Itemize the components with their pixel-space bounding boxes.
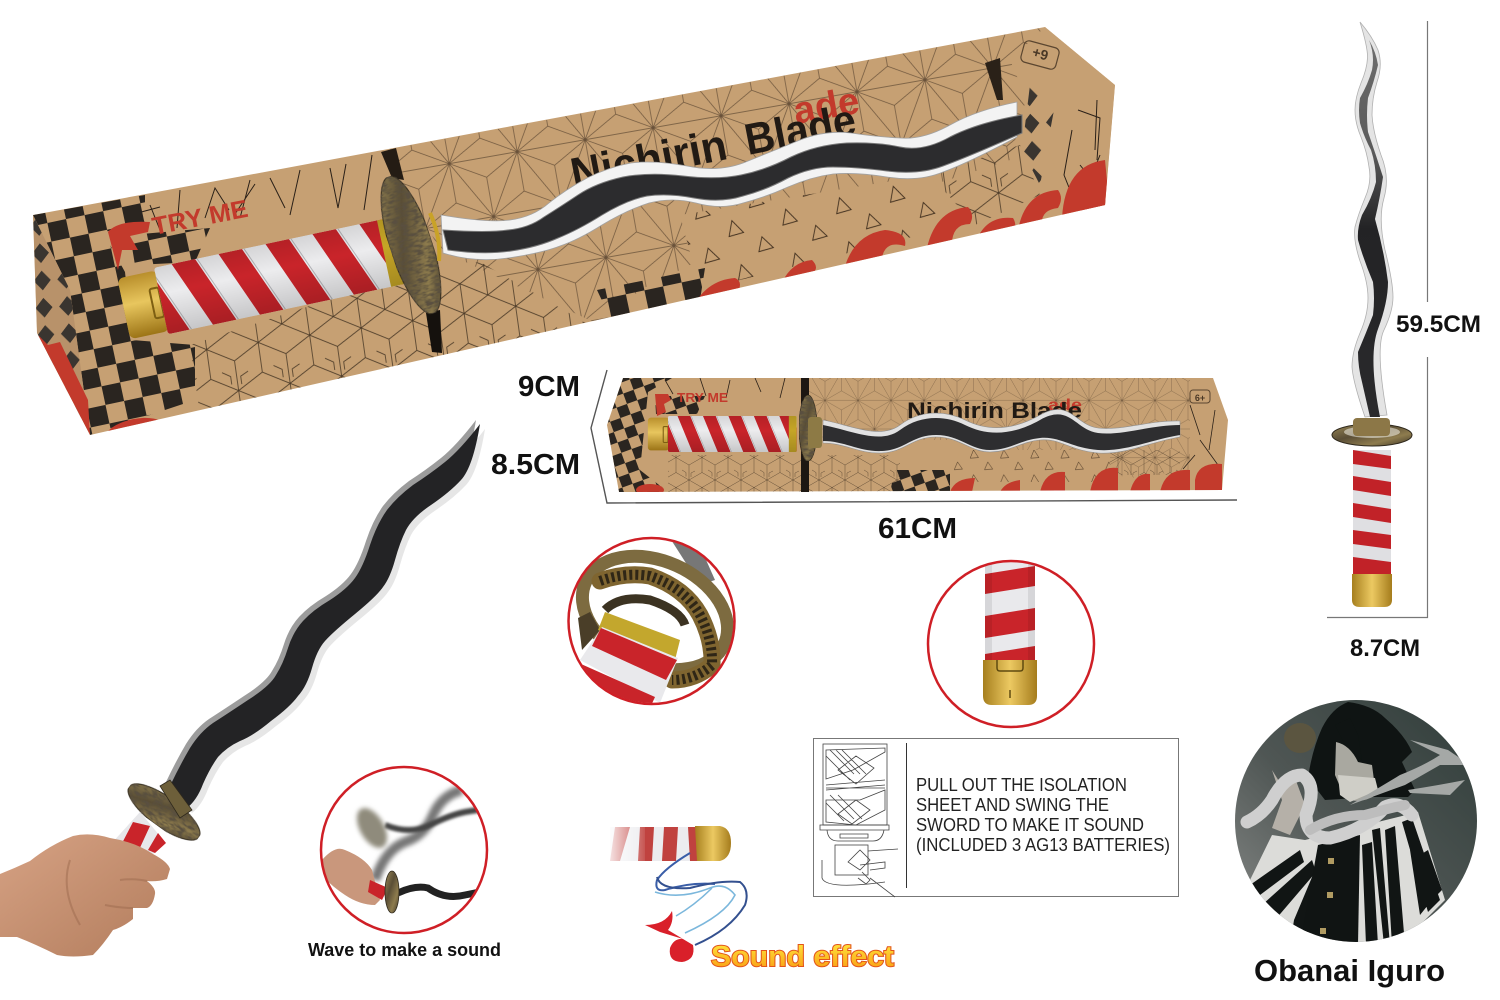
blurred upper blade bbox=[375, 790, 462, 880]
red arc near corner bbox=[108, 418, 158, 431]
detail circle: grip and battery end bbox=[928, 560, 1094, 727]
box body bbox=[33, 27, 1115, 435]
blurred middle blade bbox=[385, 808, 490, 830]
triangle pattern area bbox=[682, 176, 935, 258]
face bbox=[1335, 742, 1376, 801]
instruction panel bbox=[814, 738, 1178, 897]
crack lines on right face bbox=[1064, 100, 1100, 188]
hand bbox=[1272, 770, 1305, 835]
checker row lower centre bbox=[597, 268, 705, 322]
upright pommel bbox=[1352, 574, 1392, 607]
cube pattern on lower flap bbox=[190, 262, 590, 415]
small asanoha pattern bbox=[808, 378, 1190, 478]
red flames along bottom bbox=[699, 160, 1107, 297]
held guard bbox=[120, 775, 208, 849]
upright guard bbox=[1332, 418, 1412, 446]
caption: wave to make a sound: Wave to make a sound bbox=[308, 940, 501, 960]
packaged sword box, small dimension view bbox=[607, 378, 1228, 496]
gold pommel bbox=[983, 660, 1037, 705]
checker behind logo bbox=[130, 228, 210, 265]
TRY ME label: TRY ME bbox=[150, 195, 250, 241]
guard in box bbox=[369, 170, 453, 320]
small checker lower bbox=[890, 470, 950, 492]
small checker end flap bbox=[607, 378, 672, 492]
red logo mark bbox=[108, 222, 150, 270]
snake scales bbox=[600, 575, 712, 680]
small TRY ME label: TRY ME bbox=[677, 391, 728, 405]
haori black stripes bbox=[1250, 818, 1442, 945]
red ring bbox=[321, 767, 487, 933]
instruction text: SHEET AND SWING THE bbox=[916, 794, 1109, 815]
right end face bbox=[1010, 27, 1115, 205]
right window slit bbox=[985, 58, 1003, 100]
cube pattern right of centre bbox=[942, 145, 1040, 224]
dimension: 61CM: 61CM bbox=[878, 513, 957, 545]
small checker behind logo bbox=[655, 396, 705, 414]
hand bbox=[0, 834, 170, 956]
crack lines on upper left panel bbox=[142, 154, 372, 230]
small red logo bbox=[655, 394, 671, 416]
small box title: ade bbox=[1048, 397, 1082, 414]
red ring bbox=[568, 538, 734, 704]
box title bbox=[567, 80, 863, 199]
box title: ade bbox=[790, 80, 863, 133]
small box title: Nichirin Blade bbox=[907, 398, 1082, 423]
mask bandage bbox=[1338, 775, 1378, 802]
held handle bbox=[100, 812, 165, 862]
small cube pattern right bbox=[1110, 450, 1180, 475]
hand in circle bbox=[322, 849, 380, 905]
packaged sword box, large view bbox=[33, 27, 1115, 451]
instruction text: (INCLUDED 3 AG13 BATTERIES) bbox=[916, 834, 1170, 855]
portrait background bbox=[1230, 695, 1482, 947]
small age mark bbox=[1190, 390, 1210, 403]
snake body bbox=[600, 575, 712, 680]
label: Sound effect bbox=[711, 941, 894, 973]
dimension: 9CM: 9CM bbox=[518, 371, 580, 403]
box title: Blade bbox=[741, 95, 860, 165]
wavy blade in box bbox=[441, 102, 1022, 260]
inner coil bbox=[605, 599, 685, 625]
pommel slot bbox=[997, 660, 1023, 698]
left side face bbox=[33, 215, 90, 435]
small triangles bbox=[950, 450, 1110, 482]
body with stripes bbox=[1250, 812, 1445, 945]
checker pattern on end flap bbox=[33, 195, 195, 435]
red flame on side bbox=[38, 335, 90, 435]
small age mark: 6+ bbox=[1195, 393, 1205, 403]
small box body bbox=[607, 378, 1228, 492]
small snake head bbox=[578, 612, 600, 650]
instruction text: PULL OUT THE ISOLATION bbox=[916, 774, 1127, 795]
dimension: 8.5CM: 8.5CM bbox=[491, 449, 580, 481]
asanoha pattern on back wall bbox=[385, 27, 1045, 325]
line drawing of battery compartment bbox=[820, 744, 898, 897]
box title: Nichirin bbox=[567, 121, 731, 199]
small red flames bbox=[636, 464, 1222, 492]
age mark: 6+ bbox=[1030, 44, 1050, 64]
guard in circle bbox=[385, 871, 399, 913]
small guard bbox=[799, 395, 822, 461]
character name: Obanai Iguro bbox=[1254, 953, 1445, 988]
handle red stripe bbox=[592, 628, 677, 680]
dimension lines around small box bbox=[591, 370, 1237, 503]
upper guard slot bbox=[381, 148, 404, 180]
held handle red stripes bbox=[118, 822, 166, 853]
handle in box bbox=[117, 213, 424, 342]
lower guard slot bbox=[426, 310, 442, 353]
upright silver edge bbox=[1352, 22, 1393, 417]
sound effect illustration bbox=[605, 825, 894, 973]
finger shading bbox=[67, 860, 147, 925]
snake bbox=[1247, 775, 1412, 838]
small guard slot bbox=[801, 378, 809, 492]
instruction text: SWORD TO MAKE IT SOUND bbox=[916, 814, 1144, 835]
character portrait bbox=[1230, 695, 1482, 947]
upright sword with height and width bbox=[1332, 22, 1412, 607]
handle in circle bbox=[368, 880, 385, 900]
grip shading bbox=[985, 560, 1035, 664]
dimension: 59.5CM: 59.5CM bbox=[1396, 311, 1481, 338]
hair bbox=[1308, 702, 1415, 800]
small handle bbox=[648, 416, 807, 452]
triangles bbox=[686, 186, 936, 280]
age mark bbox=[1020, 40, 1060, 70]
hand holding sword bbox=[0, 420, 485, 956]
grip red stripes bbox=[985, 566, 1035, 664]
handle collar bbox=[598, 612, 680, 660]
small cube pattern bbox=[668, 455, 900, 492]
buttons bbox=[1320, 858, 1334, 934]
blade stub bbox=[672, 542, 715, 582]
left side diamonds bbox=[33, 220, 81, 418]
small triangle pattern bbox=[1009, 450, 1110, 470]
uniform centre bbox=[1300, 835, 1360, 945]
faded handle bbox=[605, 825, 731, 863]
bandage ribbons bbox=[1350, 740, 1470, 805]
sound waves bbox=[655, 853, 747, 945]
held blade bbox=[166, 420, 485, 813]
upright dark blade bbox=[1358, 40, 1388, 417]
right checker diamonds bbox=[1024, 88, 1054, 183]
instruction text bbox=[916, 774, 1170, 855]
red music note bbox=[645, 911, 694, 962]
brass guard ring bbox=[564, 535, 746, 691]
red ring bbox=[928, 561, 1094, 727]
handle white bbox=[580, 627, 678, 703]
height dimension line bbox=[1327, 21, 1428, 618]
background emblem bbox=[1284, 723, 1316, 753]
detail circle: guard snake bbox=[564, 535, 746, 708]
divider bbox=[906, 743, 908, 888]
handle red stripe lower bbox=[581, 664, 655, 708]
small blade bbox=[823, 409, 1180, 453]
sharp blade bbox=[398, 887, 490, 896]
upright handle bbox=[1353, 450, 1391, 574]
dimension: 8.7CM: 8.7CM bbox=[1350, 635, 1420, 662]
blurred guard bbox=[354, 805, 390, 851]
grip white bbox=[985, 560, 1035, 664]
fringe bbox=[1335, 718, 1362, 760]
small crack lines bbox=[665, 378, 1218, 469]
detail circle: wave motion bbox=[321, 767, 490, 933]
